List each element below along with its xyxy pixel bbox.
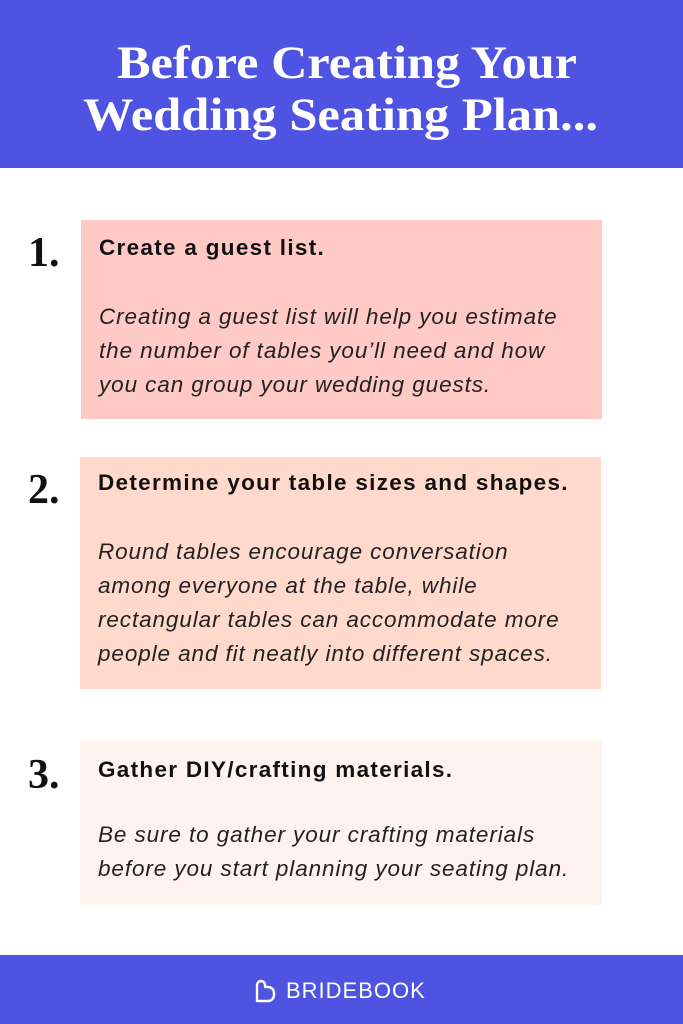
body 1: you can group your wedding guests. bbox=[99, 372, 491, 397]
panel: step 2 bbox=[80, 457, 601, 689]
icon: bridebook heart bbox=[256, 980, 276, 1002]
body 3: Be sure to gather your crafting materials bbox=[98, 822, 535, 847]
heading 1: Create a guest list. bbox=[99, 235, 325, 260]
panel: step 1 bbox=[81, 220, 602, 419]
header banner bbox=[0, 0, 683, 168]
body 2 bbox=[98, 539, 560, 666]
title: Before Creating Your bbox=[117, 37, 577, 89]
footer bbox=[0, 955, 683, 1024]
body 1: Creating a guest list will help you estimate bbox=[99, 304, 558, 329]
heading 3: Gather DIY/crafting materials. bbox=[98, 757, 453, 782]
title: Wedding Seating Plan... bbox=[83, 89, 598, 141]
number 2: 2. bbox=[28, 467, 60, 513]
heading 2: Determine your table sizes and shapes. bbox=[98, 470, 569, 495]
number 3: 3. bbox=[28, 752, 60, 798]
panel: step 3 bbox=[80, 740, 602, 905]
body 2: people and fit neatly into different spaces. bbox=[98, 641, 553, 666]
body 2: rectangular tables can accommodate more bbox=[98, 607, 560, 632]
body 3: before you start planning your seating plan. bbox=[98, 856, 569, 881]
body 1 bbox=[98, 304, 558, 397]
number 1: 1. bbox=[28, 230, 60, 276]
body 1: the number of tables you’ll need and how bbox=[99, 338, 545, 363]
body 2: Round tables encourage conversation bbox=[98, 539, 509, 564]
body 2: among everyone at the table, while bbox=[98, 573, 478, 598]
title bbox=[83, 37, 598, 141]
logo: BRIDEBOOK bbox=[286, 978, 426, 1003]
body 3 bbox=[98, 822, 569, 881]
